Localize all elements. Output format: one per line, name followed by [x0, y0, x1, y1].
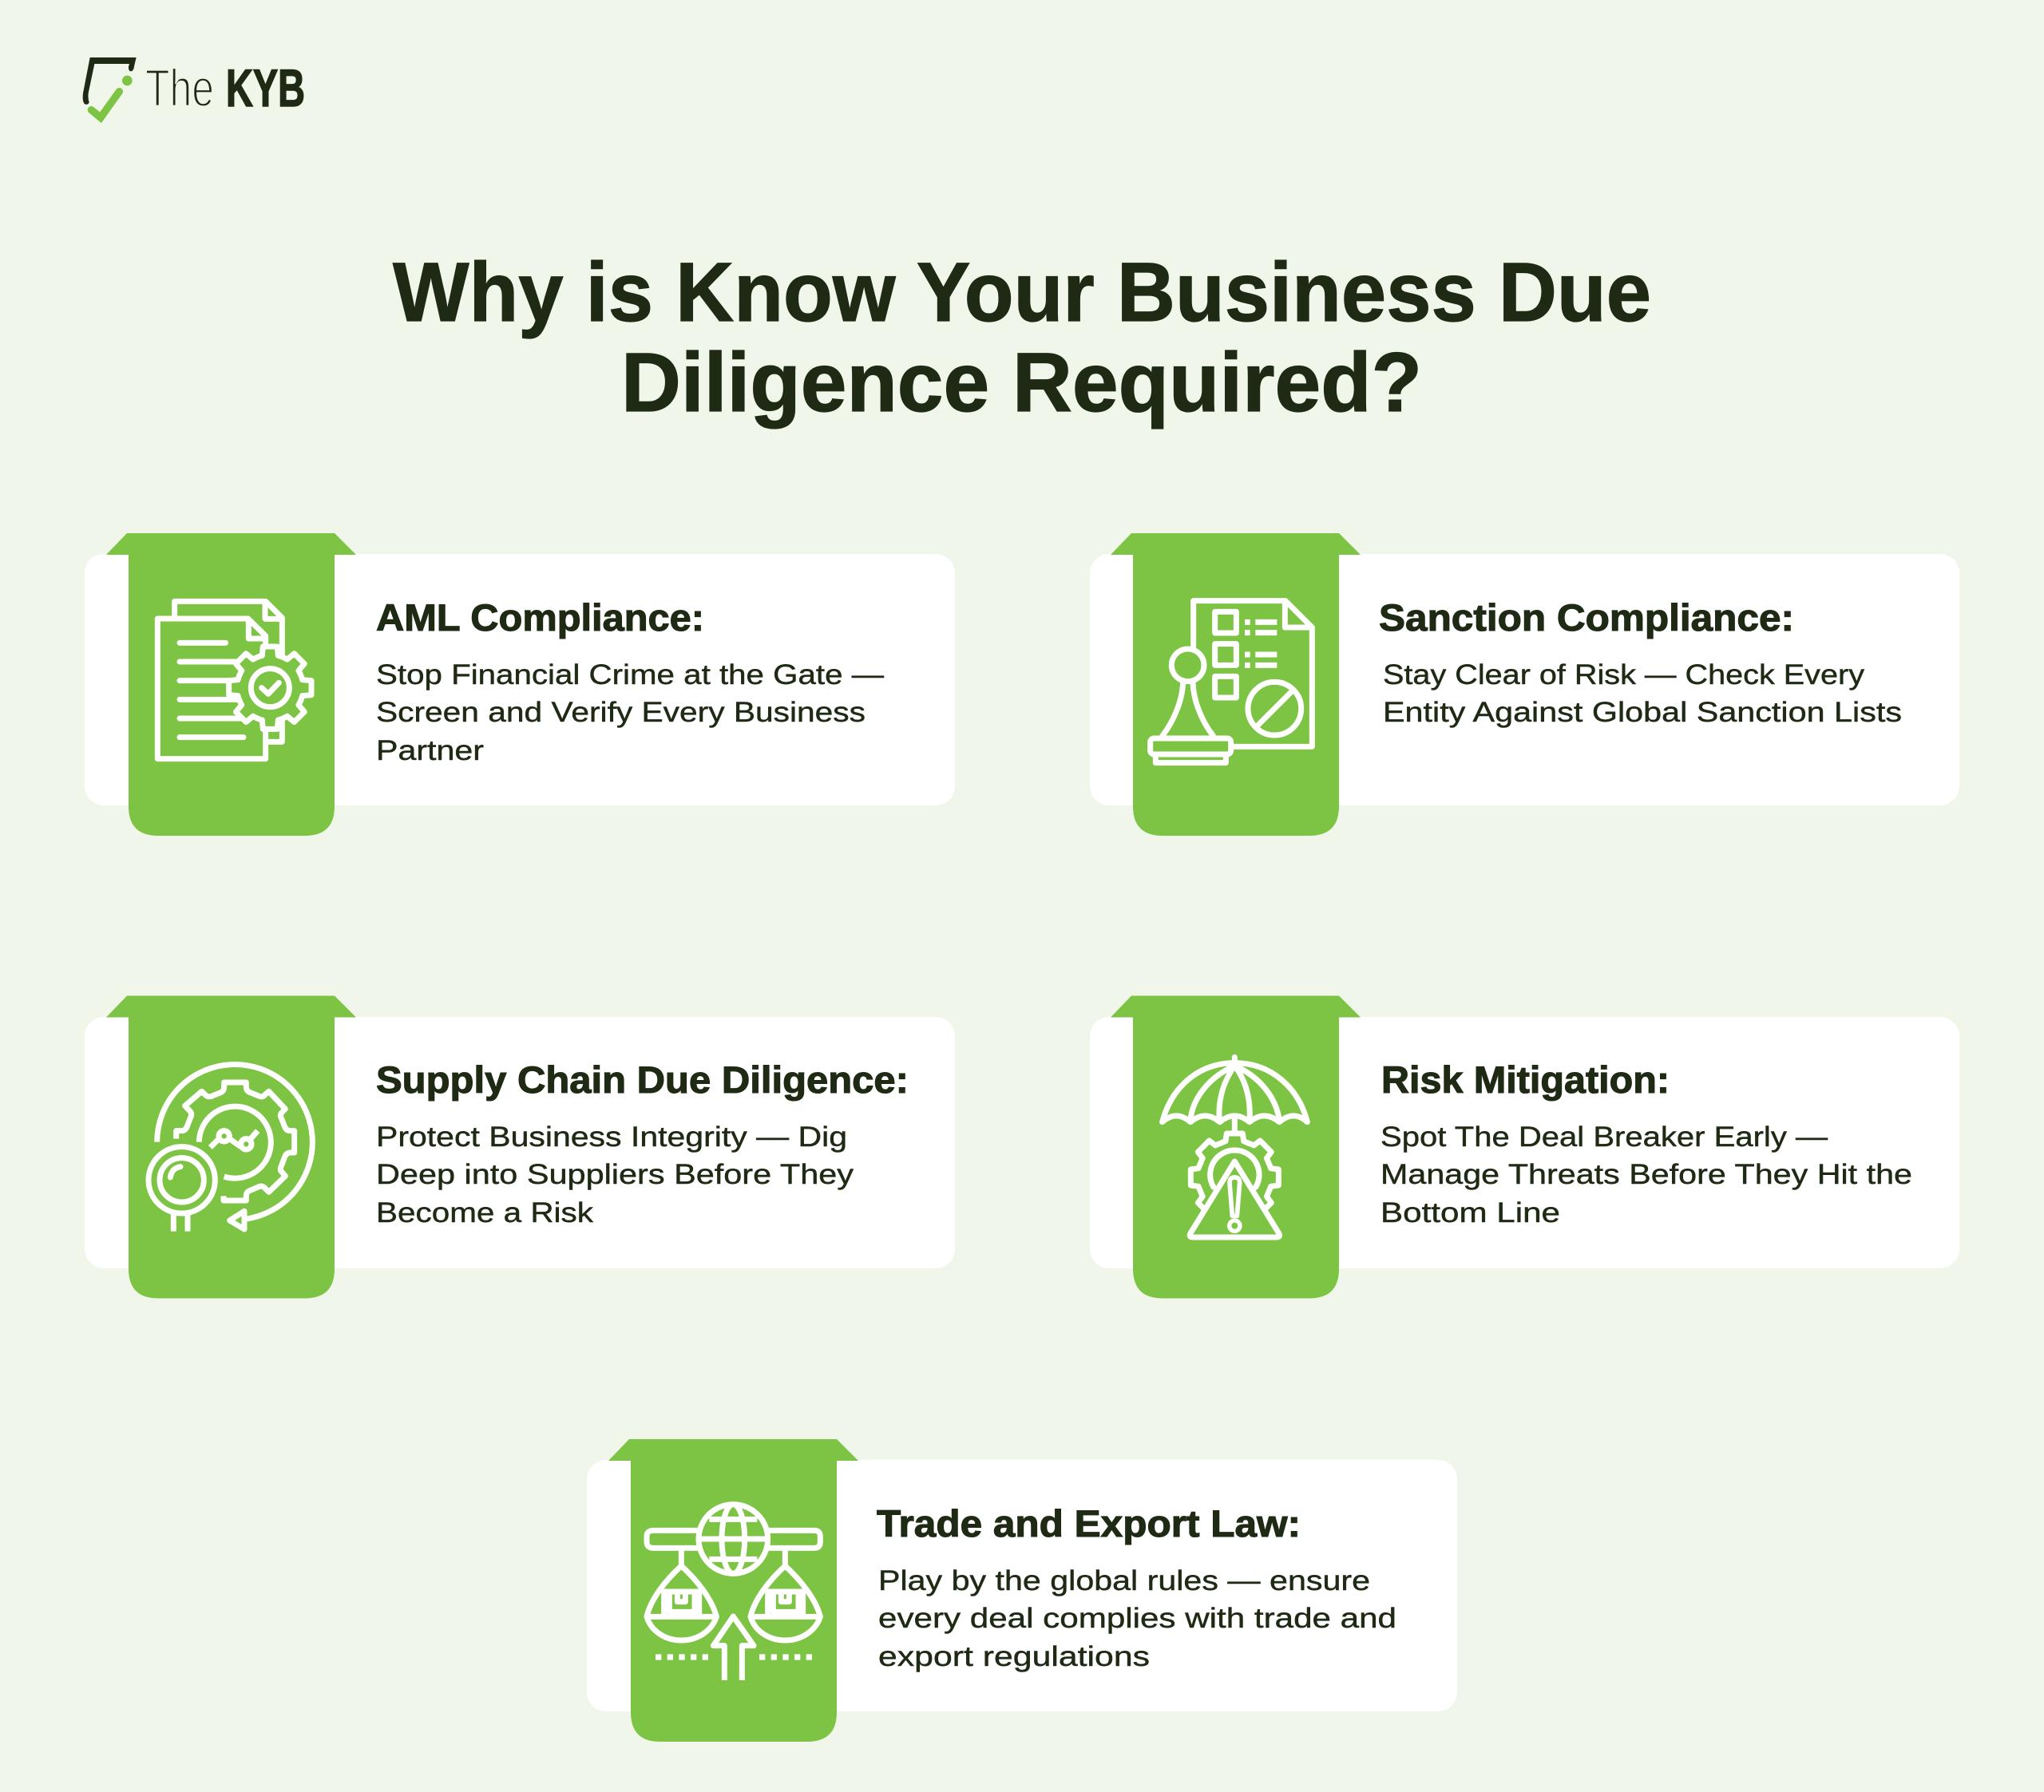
title: [393, 246, 1651, 429]
card background: [85, 554, 955, 805]
card text: Sanction Compliance:: [1379, 596, 1794, 639]
card text: AML Compliance:: [376, 596, 704, 639]
card text: Deep into Suppliers Before They: [376, 1158, 854, 1190]
card text: [376, 1058, 909, 1228]
card text: Entity Against Global Sanction Lists: [1383, 696, 1902, 728]
panel: Supply Chain Due Diligence: [85, 996, 955, 1298]
card text: export regulations: [878, 1640, 1150, 1672]
card text: Protect Business Integrity — Dig: [376, 1121, 847, 1153]
panel: Risk Mitigation: [1090, 996, 1959, 1298]
panel: Sanction Compliance: [1090, 533, 1959, 836]
green ribbon: [1111, 533, 1361, 836]
green ribbon: [106, 996, 356, 1298]
card text: Risk Mitigation:: [1381, 1058, 1670, 1101]
card text: Bottom Line: [1380, 1197, 1560, 1228]
card text: [877, 1502, 1396, 1672]
panel: Trade and Export Law: [587, 1439, 1457, 1742]
green ribbon: [608, 1439, 858, 1742]
card text: Manage Threats Before They Hit the: [1380, 1158, 1912, 1190]
card text: Partner: [376, 734, 484, 766]
card text: [376, 596, 885, 766]
card text: Play by the global rules — ensure: [878, 1565, 1370, 1596]
card text: [1379, 596, 1902, 728]
icon: checklist with stamp: [1151, 601, 1312, 763]
logo wordmark: The: [145, 58, 214, 117]
panel: AML Compliance: [85, 533, 955, 836]
card text: Supply Chain Due Diligence:: [376, 1058, 909, 1101]
icon: umbrella over gear and warning: [1163, 1057, 1307, 1237]
card background: [1090, 554, 1959, 805]
card background: [85, 1017, 955, 1268]
logo wordmark: KYB: [226, 58, 305, 117]
card text: Spot The Deal Breaker Early —: [1380, 1121, 1828, 1153]
logo wordmark: [145, 58, 305, 117]
green ribbon: [106, 533, 356, 836]
card text: Stop Financial Crime at the Gate —: [376, 659, 885, 690]
title: Why is Know Your Business Due: [393, 246, 1651, 339]
logo mark: shield with check: [83, 57, 137, 117]
icon: gear cycle with magnifier: [149, 1064, 312, 1232]
logo: The KYB: [83, 57, 305, 117]
icon: trade scales with globe: [647, 1505, 820, 1680]
card text: Stay Clear of Risk — Check Every: [1383, 659, 1864, 690]
card text: Trade and Export Law:: [877, 1502, 1301, 1545]
card background: [1090, 1017, 1959, 1268]
card text: Screen and Verify Every Business: [376, 696, 866, 728]
card text: Become a Risk: [376, 1197, 593, 1228]
title: Diligence Required?: [621, 336, 1422, 429]
card background: [587, 1460, 1457, 1711]
card text: [1380, 1058, 1912, 1228]
card text: every deal complies with trade and: [878, 1602, 1396, 1634]
icon: documents with gear check: [157, 601, 311, 759]
green ribbon: [1111, 996, 1361, 1298]
